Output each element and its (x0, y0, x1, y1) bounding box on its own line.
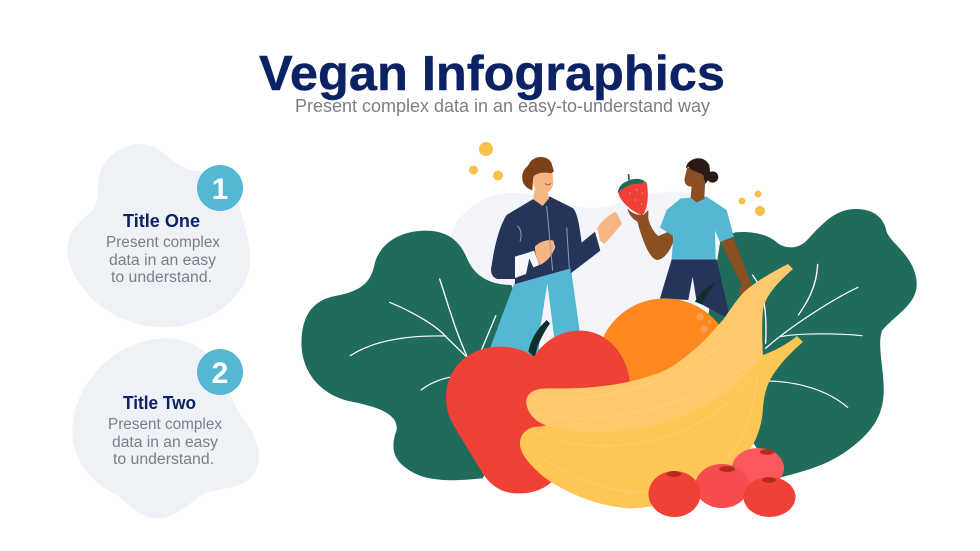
berries (648, 448, 796, 517)
left leaf (301, 231, 544, 480)
man face (533, 169, 553, 193)
decorative gold dots (469, 142, 765, 216)
right berry (744, 477, 796, 517)
body text two (108, 416, 222, 468)
woman shirt (660, 197, 734, 259)
banana highlights (527, 320, 758, 493)
body text one: to understand. (111, 269, 212, 286)
man neck (533, 187, 549, 206)
bananas (520, 264, 803, 508)
apple (446, 320, 630, 493)
title: Vegan Infographics (259, 47, 725, 101)
body text two: data in an easy (112, 434, 218, 451)
right leaf (700, 209, 917, 478)
left berry (648, 471, 700, 517)
blob background one (67, 144, 250, 327)
strawberry (618, 174, 648, 215)
pale backdrop blob (450, 192, 735, 350)
man smile (545, 183, 551, 185)
number badge two: 2 (212, 357, 228, 390)
body text one (106, 234, 220, 286)
body text one: Present complex (106, 234, 220, 251)
lower banana (520, 336, 803, 508)
body text two: Present complex (108, 416, 222, 433)
upper banana (526, 264, 793, 432)
man jacket seams (517, 206, 569, 271)
man jacket (491, 197, 600, 284)
blob background two (72, 338, 259, 518)
back berry (732, 448, 784, 488)
man hair (522, 157, 554, 190)
man figure (488, 157, 622, 357)
illustration: people with fruit (301, 142, 917, 517)
heading one: Title One (123, 211, 200, 231)
body text one: data in an easy (109, 252, 216, 269)
middle berry (695, 464, 749, 508)
orange highlights (696, 313, 711, 333)
man white gap and cuff (515, 251, 539, 278)
panel: title two (72, 338, 259, 518)
man trousers (488, 267, 580, 357)
panel: title one (67, 144, 250, 327)
number badge two (197, 349, 243, 395)
woman arms (627, 208, 753, 296)
heading two: Title Two (123, 393, 196, 413)
woman hair and bun (686, 158, 718, 184)
orange stem (695, 283, 715, 305)
woman figure (618, 158, 753, 320)
orange (597, 298, 733, 432)
man wrist cuff (595, 230, 604, 246)
body text two: to understand. (113, 451, 214, 468)
leaf veins (350, 264, 862, 407)
apple stem (528, 320, 550, 357)
subtitle: Present complex data in an easy-to-understand way (295, 96, 710, 116)
number badge one (197, 165, 243, 211)
number badge one: 1 (212, 173, 228, 206)
man hands (535, 212, 622, 265)
woman neck and face (685, 167, 707, 202)
woman trousers (660, 259, 731, 320)
